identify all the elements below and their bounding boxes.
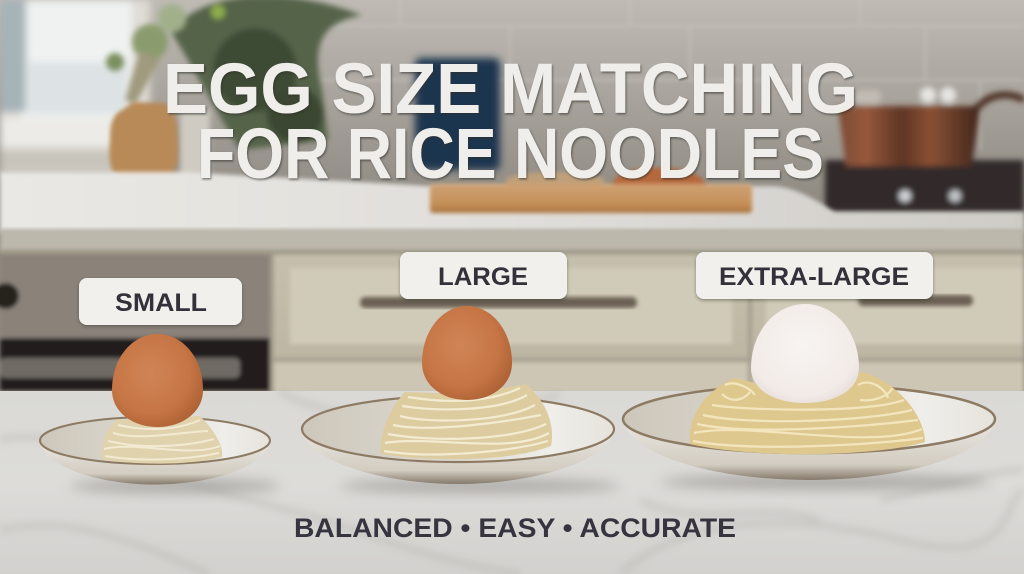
label: extra-large: EXTRA-LARGE: [719, 263, 909, 291]
tagline: BALANCED • EASY • ACCURATE: [294, 513, 736, 543]
egg: [751, 304, 859, 403]
egg: [422, 306, 512, 400]
marble countertop: [0, 391, 1024, 574]
plant: [106, 0, 362, 180]
plate: [622, 385, 996, 480]
back counter: [0, 172, 1024, 232]
egg: [112, 334, 203, 427]
stove and pot: [825, 87, 1024, 212]
plate and egg: small: [39, 334, 271, 484]
plate: [301, 396, 615, 484]
plate and egg: extra-large: [622, 304, 996, 480]
label: large: [400, 252, 567, 299]
plate and egg: large: [301, 306, 615, 484]
label: small: SMALL: [115, 289, 207, 317]
noodles: [102, 416, 222, 464]
noodles: [381, 384, 552, 459]
blue canister: [415, 58, 500, 170]
label: large: LARGE: [438, 263, 528, 291]
plate: [39, 417, 271, 484]
window: [0, 0, 150, 175]
cabinets: [0, 250, 1024, 395]
title: [163, 50, 858, 194]
noodles: [690, 372, 925, 454]
label: extra-large: [696, 252, 933, 299]
cutting board and bowls: [430, 168, 752, 213]
title: EGG SIZE MATCHING: [163, 50, 858, 129]
vase: [110, 102, 178, 180]
title: FOR RICE NOODLES: [197, 115, 824, 194]
label: small: [79, 278, 242, 325]
